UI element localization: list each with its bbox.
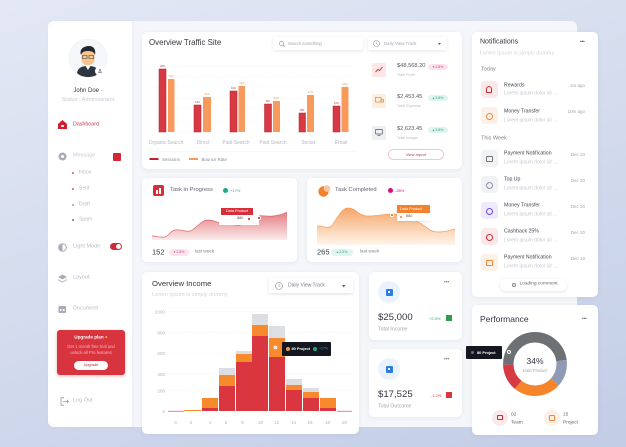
stat: total budget: Total budget (397, 136, 418, 140)
notification: top up: Dec 20 (571, 177, 585, 182)
area chart: progress (152, 212, 288, 240)
nav item: log out (60, 397, 93, 406)
histogram chart: 1000 (155, 310, 165, 314)
notification: cashback: Lorem ipsum dolor sit ... (504, 238, 557, 244)
histogram chart: 800 (157, 330, 165, 336)
histogram chart: 16 (307, 420, 313, 425)
tooltip: 80 project (282, 342, 331, 356)
pill: change (331, 249, 353, 256)
stat: total expense: $2,453.45 (397, 94, 422, 100)
change indicator (223, 188, 240, 193)
bar chart: traffic: 40% (274, 96, 280, 100)
bar chart: traffic (148, 64, 355, 162)
marker dot (390, 213, 394, 217)
histogram chart (155, 310, 352, 425)
nav item: message (58, 152, 121, 161)
menu dots: ••• (444, 280, 449, 286)
tooltip: 80 project: +17% (319, 346, 328, 350)
submenu: message (72, 170, 92, 222)
heading: Performance (480, 314, 529, 324)
histogram chart: 6 (225, 420, 228, 425)
change indicator: +17% (230, 188, 240, 193)
histogram chart: 12 (274, 420, 279, 425)
tooltip: data product: 880 (237, 216, 243, 220)
menu dots: ••• (444, 356, 449, 362)
heading: Notifications (480, 38, 518, 46)
stat: total budget: $2,623.45 (397, 126, 422, 132)
panel: total outcome (369, 349, 462, 417)
notification: payment: Payment Notification (504, 150, 552, 156)
stat: total budget: ▴ 3.8% (433, 128, 443, 132)
notification: rewards: Rewards (504, 82, 524, 88)
notification: money transfer: Lorem ipsum dolor sit ... (504, 211, 557, 217)
icon: wallet (378, 281, 400, 303)
change indicator: -28% (395, 188, 404, 193)
stat: team: 02 (511, 413, 516, 418)
notification: payment (481, 254, 585, 271)
notification: cashback: Dec 20 (571, 229, 585, 234)
pill: change: ▾ 2.8% (174, 250, 184, 254)
button: view report (388, 149, 444, 160)
stat: total profit: $48,568.20 (397, 63, 425, 69)
nav item: light mode (58, 243, 122, 252)
change indicator (388, 188, 404, 193)
stat: total expense: Total Expense (397, 104, 421, 108)
tooltip: data product: Data Product (400, 207, 422, 211)
panel: notifications (472, 32, 598, 297)
notification: top up: Top Up (504, 176, 520, 182)
bar chart: traffic: 10K (300, 108, 305, 112)
caption: Total Income (378, 326, 407, 332)
subheading: Lorem Ipsum is simply dummy (480, 50, 554, 56)
nav item: light mode: Light Mode (73, 243, 100, 249)
nav item: dashboard (58, 120, 99, 129)
section label: this week: This Week (481, 135, 507, 141)
panel: overview traffic site (142, 32, 462, 169)
notification: rewards: 1m ago (570, 83, 585, 88)
submenu: message: Draft (79, 202, 90, 208)
bar chart: traffic: 42% (308, 90, 314, 94)
icon: wallet (378, 358, 400, 380)
user name: John Doe - (73, 88, 103, 94)
bar chart: traffic: Paid Search (222, 140, 250, 146)
heading: Overview Traffic Site (149, 38, 221, 47)
tooltip: data product: 880 (406, 214, 412, 218)
notification: cashback (481, 228, 585, 245)
tooltip: data product (397, 205, 430, 221)
heading: Task in Progress (170, 187, 213, 193)
caption: last week (195, 249, 214, 254)
bar chart: traffic: 72% (168, 74, 174, 78)
dropdown: daily view track: Daily View Track (288, 282, 325, 288)
donut chart: 34% (526, 356, 544, 366)
panel: sidebar (48, 21, 132, 427)
stat: total expense: ▴ 3.8% (433, 96, 443, 100)
notification: payment: Dec 23 (571, 151, 585, 156)
bar chart: traffic: Bounce Rate (202, 157, 227, 162)
histogram chart: 18 (325, 420, 330, 425)
subheading: Lorem Ipsum is simply dummy (152, 292, 228, 298)
nav item: document: Document (73, 305, 98, 311)
bar chart: traffic: Sessions (162, 157, 181, 162)
histogram chart: 400 (157, 372, 165, 377)
menu dots: ••• (582, 316, 587, 321)
histogram chart: 20 (342, 420, 347, 425)
notification: money transfer: Lorem ipsum dolor sit ... (504, 118, 557, 124)
background dashboard panel (48, 21, 577, 427)
callout: upgrade plan: Get 1 month free trial and (67, 343, 115, 348)
notification: money transfer: Dec 20 (571, 203, 585, 208)
donut chart (503, 332, 567, 396)
caption: last week (360, 249, 379, 254)
notification: rewards (481, 81, 585, 98)
stat: total profit (372, 63, 448, 77)
bar chart: traffic: 12K (195, 100, 200, 104)
donut chart: Data Product (523, 368, 548, 373)
bar chart: traffic: Direct (196, 140, 210, 146)
notification: top up: Lorem ipsum dolor sit ... (504, 186, 557, 192)
submenu: message: Inbox (79, 170, 91, 176)
notification: money transfer (481, 202, 585, 219)
bar chart: traffic: 16K (231, 86, 236, 90)
stat: project (544, 410, 578, 426)
value: $25,000 (378, 312, 413, 323)
submenu: message: Sent (79, 186, 89, 192)
nav item: log out: Log Out (73, 397, 93, 403)
stat: total expense (372, 94, 448, 108)
notification: money transfer: Money Transfer (504, 108, 540, 114)
stat: total budget (372, 126, 448, 140)
change: -1,2% (431, 392, 441, 398)
panel: performance (472, 305, 598, 435)
histogram chart: 2 (190, 420, 193, 425)
nav item: dashboard: Dashboard (73, 121, 99, 127)
dropdown: daily view track (269, 278, 353, 293)
callout: upgrade plan: Upgrade (84, 362, 98, 366)
tooltip: 80 project: 80 Project (292, 346, 310, 351)
notification: payment: Payment Notification (504, 254, 552, 260)
panel: task in progress (142, 178, 297, 262)
user status: Status : Administrator (61, 97, 115, 103)
dropdown: daily view track: Daily View Track (384, 40, 416, 45)
stat: project: Project (563, 420, 578, 425)
callout: upgrade plan: Upgrade plan ● (74, 335, 108, 340)
histogram chart: 10 (258, 420, 263, 425)
value: 152: 152 (152, 247, 165, 256)
bar chart: traffic: Social (301, 140, 315, 146)
histogram chart: 4 (209, 420, 212, 425)
bar chart: traffic: 31% (204, 92, 210, 96)
panel: overview income (142, 272, 359, 434)
caption: Total Outcome (378, 403, 411, 409)
change (429, 315, 452, 321)
icon: user avatar (68, 38, 108, 78)
notification: money transfer: Money Transfer (504, 202, 540, 208)
notification: payment: Dec 19 (571, 255, 585, 260)
bar chart: traffic: 26K (160, 64, 165, 68)
change: +2,5% (429, 316, 440, 320)
area chart: completed (317, 208, 455, 245)
pill: change: ▴ 2.3% (337, 250, 347, 254)
stat: total profit: ▾ 2.8% (433, 65, 443, 69)
heading: Task Completed (335, 187, 377, 193)
callout: upgrade plan: unlock all Pro features (70, 350, 112, 355)
pill: change (169, 249, 189, 256)
search box (273, 37, 363, 50)
tooltip: donut 80 project: 80 Project (477, 350, 496, 355)
menu dots: ••• (580, 39, 585, 44)
histogram chart: 0 (162, 409, 165, 414)
stat: team (492, 410, 523, 426)
bar chart: traffic: Paid Search (259, 140, 287, 146)
nav item: message: Message (73, 152, 95, 158)
panel: total income (369, 272, 462, 340)
icon: bar chart tile (153, 185, 164, 196)
search box: Search something (288, 40, 322, 45)
dropdown: daily view track (368, 37, 447, 50)
notification: payment (481, 150, 585, 167)
bar chart: traffic: Email (335, 140, 347, 146)
toggle (110, 243, 122, 250)
nav item: layout: Layout (73, 274, 90, 280)
heading: Overview Income (152, 279, 211, 288)
bar chart: traffic: 11K (266, 99, 271, 103)
panel: task completed (307, 178, 462, 262)
button: loading comment: Loading comment (520, 282, 558, 287)
tooltip: donut 80 project (466, 346, 502, 359)
notification: cashback: Cashback 25% (504, 228, 539, 234)
tooltip: data product: Data Product (226, 209, 248, 213)
value: 265: 265 (317, 247, 330, 256)
notification: top up (481, 176, 585, 193)
notification: money transfer (481, 107, 585, 124)
button: loading comment (500, 279, 567, 291)
notification: payment: Lorem ipsum dolor sit ... (504, 160, 557, 166)
histogram chart: 200 (157, 388, 165, 394)
notification: payment: Lorem ipsum dolor sit ... (504, 264, 557, 270)
nav item: document (58, 305, 98, 313)
notification: rewards: Lorem ipsum dolor sit ... (504, 90, 557, 96)
stat: total profit: Total Profit (397, 73, 415, 77)
value: $17,525 (378, 389, 413, 400)
histogram chart: 600 (157, 351, 165, 356)
marker dot (256, 216, 260, 220)
submenu: message: Spam (79, 216, 92, 222)
bar chart: traffic: Organic Search (149, 140, 184, 146)
notification: money transfer: 10m ago (567, 109, 585, 114)
histogram chart: 8 (241, 420, 244, 425)
histogram chart: 14 (291, 420, 296, 425)
nav item: layout (58, 274, 90, 283)
bar chart: traffic: 62% (342, 82, 348, 86)
histogram chart: 0 (174, 420, 177, 425)
bar chart: traffic: 10K (334, 101, 339, 105)
section label: today: Today (481, 66, 496, 72)
button: view report: View report (406, 152, 426, 157)
bar chart: traffic: 55% (239, 81, 245, 85)
icon: pie tile (318, 185, 330, 197)
marker dot: donut (506, 350, 510, 354)
stat: team: Team (511, 420, 523, 425)
callout: upgrade plan (57, 330, 125, 375)
change (431, 392, 452, 398)
tooltip: data product (219, 208, 259, 225)
stat: project: 15 (563, 413, 568, 418)
